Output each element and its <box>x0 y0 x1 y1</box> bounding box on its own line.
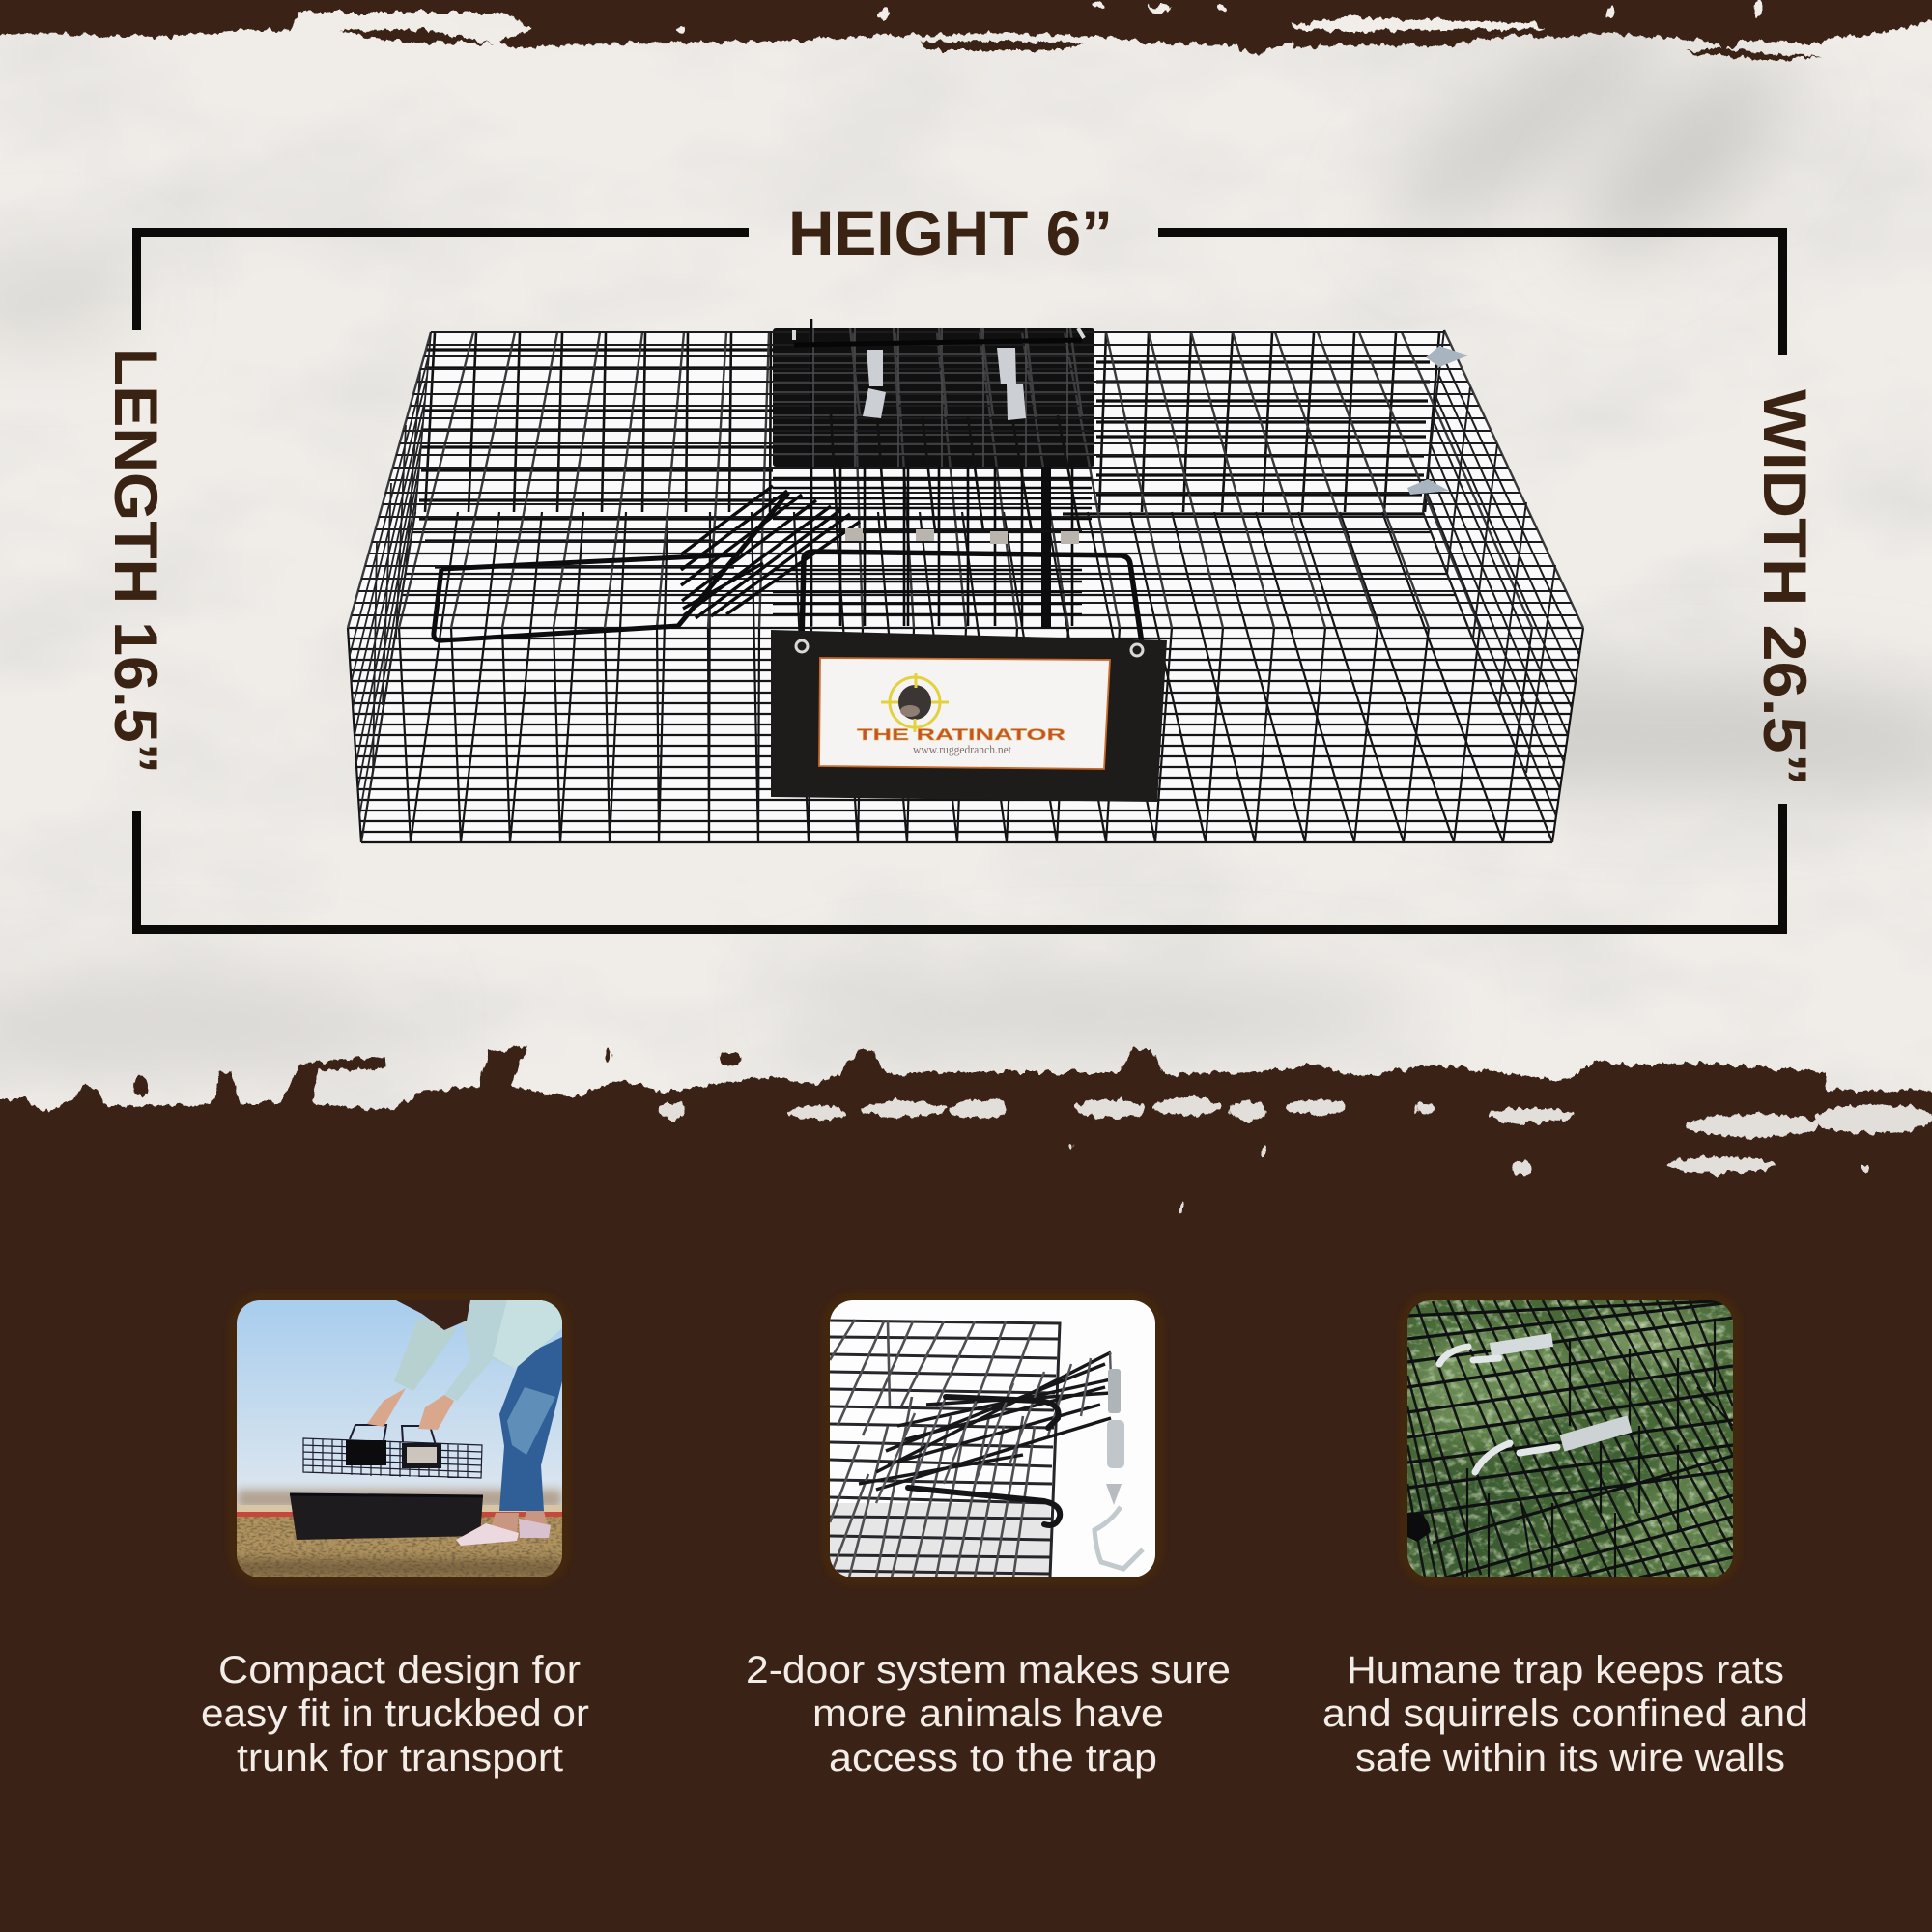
feature 1: caption <box>201 1649 589 1779</box>
left door frame and handle <box>434 493 788 640</box>
dimension frame <box>132 228 1787 934</box>
jeans <box>499 1337 562 1511</box>
carry handle <box>802 552 1142 643</box>
background: plaster texture <box>0 0 1932 1159</box>
left door diagonal mesh <box>681 486 860 618</box>
heading: height dimension: HEIGHT 6” <box>788 197 1113 269</box>
silver latch clips <box>863 348 1026 420</box>
logo: target reticle and rat <box>881 673 949 732</box>
back door handle bar <box>794 340 1082 345</box>
feature 2: caption: access to the trap <box>829 1737 1157 1779</box>
photo: woman lowering trap into tub <box>237 1300 562 1577</box>
springs and clips <box>1491 1340 1552 1350</box>
trap being lifted <box>303 1425 482 1478</box>
white flecks in lower brown panel <box>658 1097 1932 1213</box>
back door: solid black panel <box>773 328 1094 467</box>
springs <box>1108 1369 1121 1413</box>
back door mesh over panel <box>773 328 1094 467</box>
heading: length dimension: LENGTH 16.5” <box>101 348 169 774</box>
white flecks in top brown band <box>675 1 1762 33</box>
cage interior floor <box>348 330 1583 842</box>
feature 3: caption: Humane trap keeps rats <box>1347 1649 1784 1691</box>
torn brown edge: divider to lower panel <box>0 1045 1932 1932</box>
product: wire cage trap <box>348 319 1583 842</box>
sign label card <box>819 658 1110 769</box>
photo: two-door close-up <box>830 1300 1155 1577</box>
metal hook <box>1094 1507 1143 1569</box>
cage mesh: floor <box>361 512 1552 842</box>
tub <box>290 1494 483 1540</box>
corner brackets on right wall <box>1407 346 1468 495</box>
ankles and shoes <box>492 1513 519 1532</box>
feature 2: caption: 2-door system makes sure <box>746 1649 1231 1691</box>
logo wordmark: THE RATINATOR <box>857 725 1065 744</box>
cage mesh: left side wall <box>350 332 431 842</box>
silver door tabs <box>845 528 1079 544</box>
cage mesh: front wall <box>348 628 1583 842</box>
heading: width dimension: WIDTH 26.5” <box>1750 389 1818 786</box>
feature 1: caption: Compact design for <box>218 1649 581 1691</box>
feature 2: caption: more animals have <box>812 1692 1164 1735</box>
inner dark frame <box>1467 1320 1733 1577</box>
hair <box>396 1300 470 1330</box>
trap door, raised <box>859 1352 1111 1490</box>
feature 2: caption <box>746 1649 1231 1779</box>
thick handles <box>908 1397 1060 1525</box>
photo: wire walls over grass <box>1398 1300 1746 1580</box>
feature 1: caption: trunk for transport <box>237 1737 563 1779</box>
trap tunnel dark uprights and rows <box>773 319 1092 626</box>
logo web address: www.ruggedranch.net <box>913 743 1011 756</box>
cage mesh: back wall uprights <box>425 333 1439 512</box>
feature 3: caption: safe within its wire walls <box>1355 1737 1785 1779</box>
shallow mesh wires <box>1407 1300 1733 1577</box>
front door wires <box>831 413 1082 531</box>
feature 3: caption: and squirrels confined and <box>1322 1692 1808 1735</box>
feature 2: photo tile <box>822 1293 1163 1585</box>
feature 3: caption <box>1322 1649 1808 1779</box>
sign hanger rings <box>796 640 1143 656</box>
feature 3: photo tile <box>1398 1293 1746 1585</box>
sign plate <box>771 630 1167 802</box>
torn brown edge: top <box>0 0 1932 60</box>
feature 1: caption: easy fit in truckbed or <box>201 1692 589 1735</box>
hands <box>367 1388 406 1427</box>
cage mesh: back wall heavy rows <box>419 350 1430 567</box>
cage mesh: right side wall <box>1423 330 1579 842</box>
steep mesh wires <box>1407 1300 1733 1577</box>
cage mesh: top panel <box>348 330 1583 628</box>
feature 1: photo tile <box>229 1293 570 1585</box>
shirt <box>444 1300 562 1401</box>
